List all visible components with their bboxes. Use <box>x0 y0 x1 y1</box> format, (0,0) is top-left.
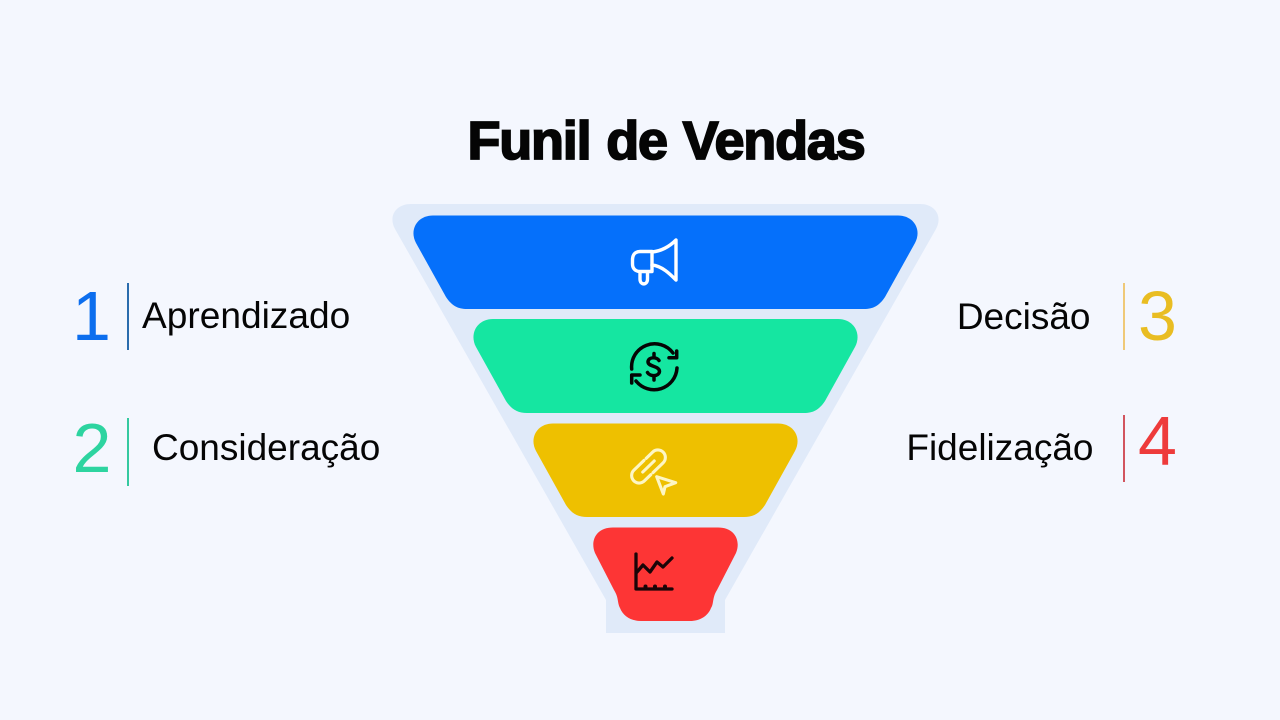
step 1: Aprendizado: 1 <box>72 277 111 355</box>
icon: megaphone <box>632 240 676 284</box>
title: Funil de Vendas <box>467 111 865 171</box>
step 1: Aprendizado: Aprendizado <box>142 294 350 336</box>
band 2: green <box>473 319 858 413</box>
step 2: Consideração: 2 <box>72 409 111 487</box>
step 1: Aprendizado <box>72 277 350 355</box>
step 3: Decisão <box>957 277 1177 355</box>
step 4: Fidelização <box>906 402 1177 482</box>
step 4: Fidelização: 4 <box>1138 402 1177 480</box>
band 1: blue <box>413 216 918 309</box>
band 3: yellow <box>533 424 798 517</box>
band 4: red <box>593 528 738 621</box>
icon: dollar exchange <box>632 344 677 390</box>
step 2: Consideração <box>72 409 380 487</box>
step 2: Consideração: Consideração <box>152 427 380 468</box>
icon: link and cursor <box>629 447 676 494</box>
panel: sales funnel <box>392 204 939 633</box>
step 4: Fidelização: Fidelização <box>906 427 1094 468</box>
step 3: Decisão: Decisão <box>957 296 1090 337</box>
step 3: Decisão: 3 <box>1138 277 1177 355</box>
icon: line chart <box>636 554 672 589</box>
funnel background <box>392 204 939 633</box>
